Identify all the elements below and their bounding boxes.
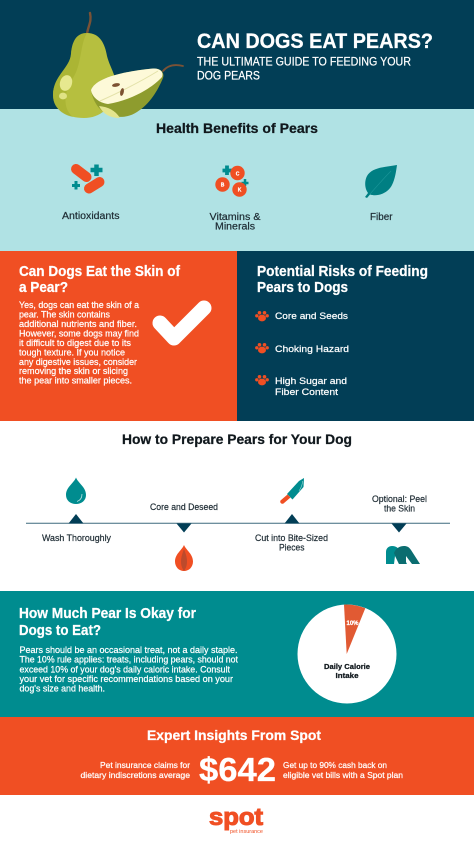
- label: cut: [255, 533, 328, 554]
- pie chart: daily calorie intake: 10%: [346, 621, 359, 627]
- text: skin body: the pear into smaller pieces.: [19, 376, 132, 386]
- heading: skin: a Pear?: [19, 280, 68, 296]
- text: cash back: [283, 760, 403, 780]
- icon: peel: [386, 546, 420, 564]
- text: skin body: removing the skin or slicing: [19, 366, 128, 376]
- text: how much body: The 10% rule applies: treats, including pears, should not: [20, 655, 238, 665]
- risk: sugar and fiber: High Sugar and: [275, 376, 347, 387]
- icon: paw: [255, 311, 269, 321]
- heading: prepare: How to Prepare Pears for Your Dog: [122, 432, 352, 447]
- text: skin body: However, some dogs may find: [19, 328, 139, 338]
- icon: vitamins: C: [236, 172, 240, 178]
- heading: skin: Can Dogs Eat the Skin of: [19, 264, 180, 280]
- panel: potential risks: [237, 251, 474, 421]
- text: cash back: Get up to 90% cash back on: [283, 760, 387, 770]
- text: skin body: [19, 300, 140, 386]
- heading: health benefits: Health Benefits of Pears: [156, 121, 318, 136]
- title: CAN DOGS EAT PEARS?: [197, 30, 433, 53]
- heading: how much: How Much Pear Is Okay for: [19, 606, 196, 622]
- icon: paw: [255, 343, 269, 353]
- icon: knife: [280, 478, 304, 504]
- label: cut: Cut into Bite-Sized: [255, 533, 328, 544]
- label: vitamins and minerals: [210, 212, 261, 232]
- text: skin body: it difficult to digest due to its: [19, 338, 131, 348]
- text: skin body: any digestive issues, consider: [19, 357, 137, 367]
- label: antioxidants: Antioxidants: [62, 211, 120, 222]
- label: peel: Optional: Peel: [372, 494, 427, 505]
- panel: how much pear: [0, 591, 474, 717]
- subtitle: [197, 56, 411, 82]
- timeline: [26, 514, 450, 532]
- text: how much body: your vet for specific recommendations based on your: [20, 674, 233, 684]
- subtitle: THE ULTIMATE GUIDE TO FEEDING YOUR: [197, 56, 411, 68]
- label: core: Core and Deseed: [150, 502, 218, 513]
- panel: how to prepare: [0, 421, 474, 591]
- text: how much body: exceed 10% of your dog's daily caloric intake. Consult: [20, 664, 230, 674]
- text: skin body: Yes, dogs can eat the skin of a: [19, 300, 140, 310]
- label: cut: Pieces: [279, 542, 305, 554]
- heading: risks: Pears to Dogs: [257, 280, 348, 296]
- text: how much body: Pears should be an occasional treat, not a daily staple.: [20, 645, 238, 655]
- label: vitamins and minerals: Minerals: [215, 222, 255, 232]
- icon: check mark: [160, 308, 204, 338]
- panel: skin of a pear: [0, 251, 237, 421]
- icon: vitamins: B: [221, 182, 225, 188]
- risk: choking hazard: Choking Hazard: [275, 344, 349, 355]
- stat: 642: $642: [199, 751, 276, 788]
- pie chart: daily calorie intake: [298, 604, 396, 704]
- risk: sugar and fiber: Fiber Content: [275, 387, 338, 398]
- icon: pills: [72, 164, 102, 190]
- heading: how much: [19, 606, 196, 639]
- pie chart: daily calorie intake: Daily Calorie: [324, 662, 370, 671]
- icon: vitamins: K: [238, 188, 242, 194]
- icon: leaf: [365, 165, 397, 198]
- text: how much body: dog's size and health.: [20, 684, 105, 694]
- panel: header: [0, 0, 474, 109]
- heading: how much: Dogs to Eat?: [19, 623, 101, 639]
- panel: expert insights: [0, 717, 474, 795]
- icon: water drop: [66, 478, 86, 504]
- text: claims: dietary indiscretions average: [80, 770, 190, 780]
- heading: expert insights: Expert Insights From Spot: [147, 727, 321, 743]
- icon: vitamins: [215, 166, 248, 197]
- label: wash: Wash Thoroughly: [42, 533, 111, 544]
- text: claims: Pet insurance claims for: [100, 760, 190, 770]
- icon: seed: [175, 545, 193, 571]
- logo: spot pet insurance: pet insurance: [230, 829, 263, 835]
- heading: risks: Potential Risks of Feeding: [257, 264, 428, 280]
- pie chart: daily calorie intake: Intake: [336, 671, 358, 680]
- text: skin body: pear. The skin contains: [19, 310, 110, 320]
- text: claims: [80, 760, 190, 780]
- text: skin body: tough texture. If you notice: [19, 347, 125, 357]
- panel: health benefits: [0, 109, 474, 251]
- label: vitamins and minerals: Vitamins &: [210, 212, 261, 223]
- subtitle: DOG PEARS: [197, 70, 260, 82]
- icon: paw: [255, 375, 269, 385]
- heading: skin: [19, 264, 180, 296]
- label: peel: [372, 494, 427, 514]
- risk: core and seeds: Core and Seeds: [275, 311, 348, 322]
- heading: risks: [257, 264, 428, 296]
- text: skin body: additional nutrients and fiber.: [19, 319, 137, 329]
- text: cash back: eligible vet bills with a Spot plan: [283, 770, 403, 780]
- logo: spot pet insurance: spot: [209, 804, 263, 831]
- text: how much body: [20, 645, 238, 694]
- label: fiber: Fiber: [370, 212, 393, 223]
- icon: pears illustration: [53, 13, 183, 118]
- panel: footer logo: [0, 795, 474, 842]
- label: peel: the Skin: [384, 504, 415, 514]
- risk: sugar and fiber: [275, 376, 347, 398]
